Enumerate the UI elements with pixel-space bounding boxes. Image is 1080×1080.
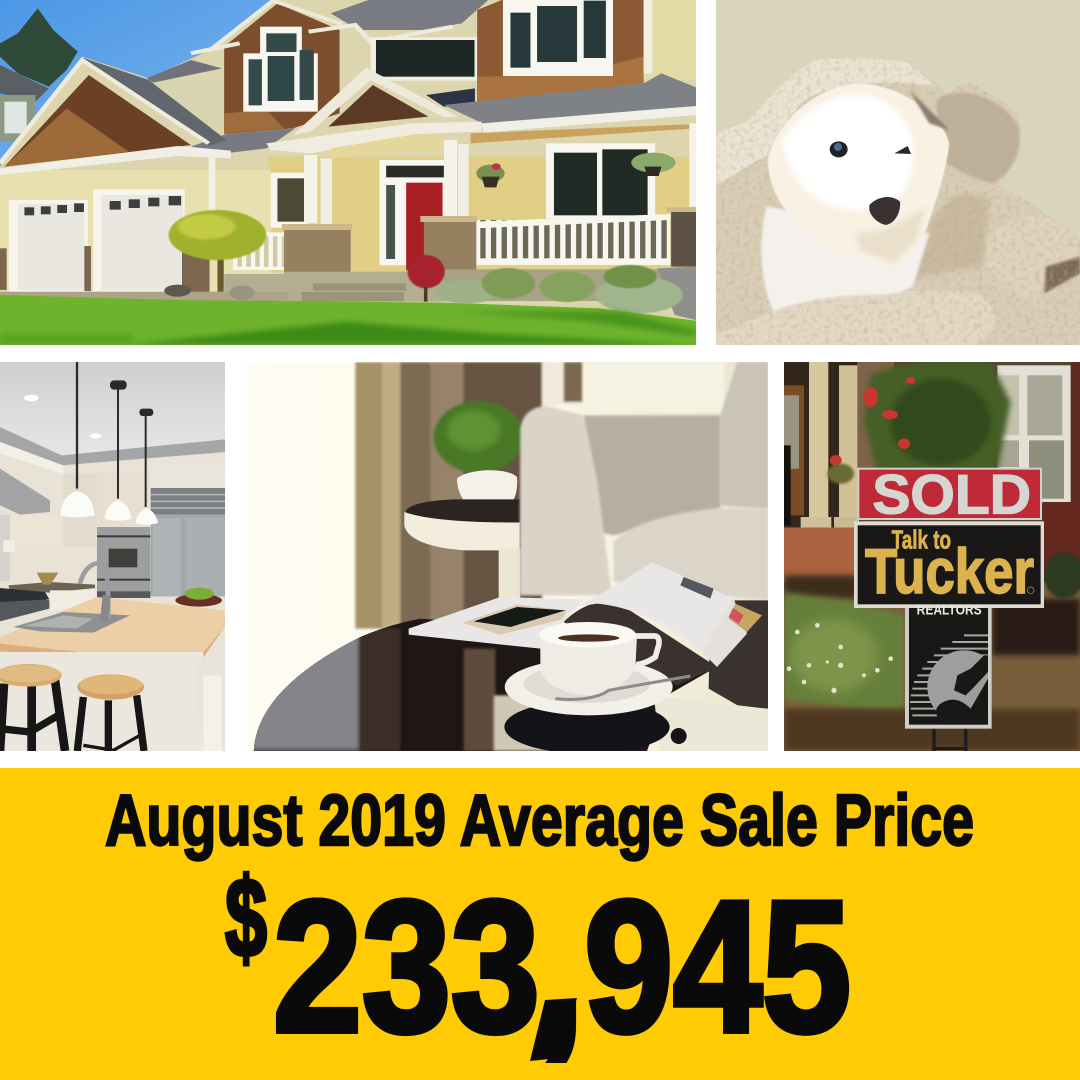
sign: Talk to Tucker xyxy=(854,464,1044,729)
yellow price banner xyxy=(0,768,1080,1080)
price: $233,945: 233,945 xyxy=(273,862,851,1071)
photo: living room with coffee xyxy=(247,362,768,754)
sign: Talk to Tucker: SOLD xyxy=(872,464,1031,526)
photo: kitchen xyxy=(0,362,225,751)
sign: Talk to Tucker: Talk to xyxy=(892,525,951,555)
price: $233,945: $ xyxy=(225,855,267,980)
photo: sold sign in garden xyxy=(784,359,1080,751)
photo: dog under blanket xyxy=(716,0,1080,345)
photo: house exterior xyxy=(0,0,696,345)
sign: Talk to Tucker: Tucker xyxy=(865,537,1034,607)
sign: Talk to Tucker: REALTORS xyxy=(917,603,982,619)
